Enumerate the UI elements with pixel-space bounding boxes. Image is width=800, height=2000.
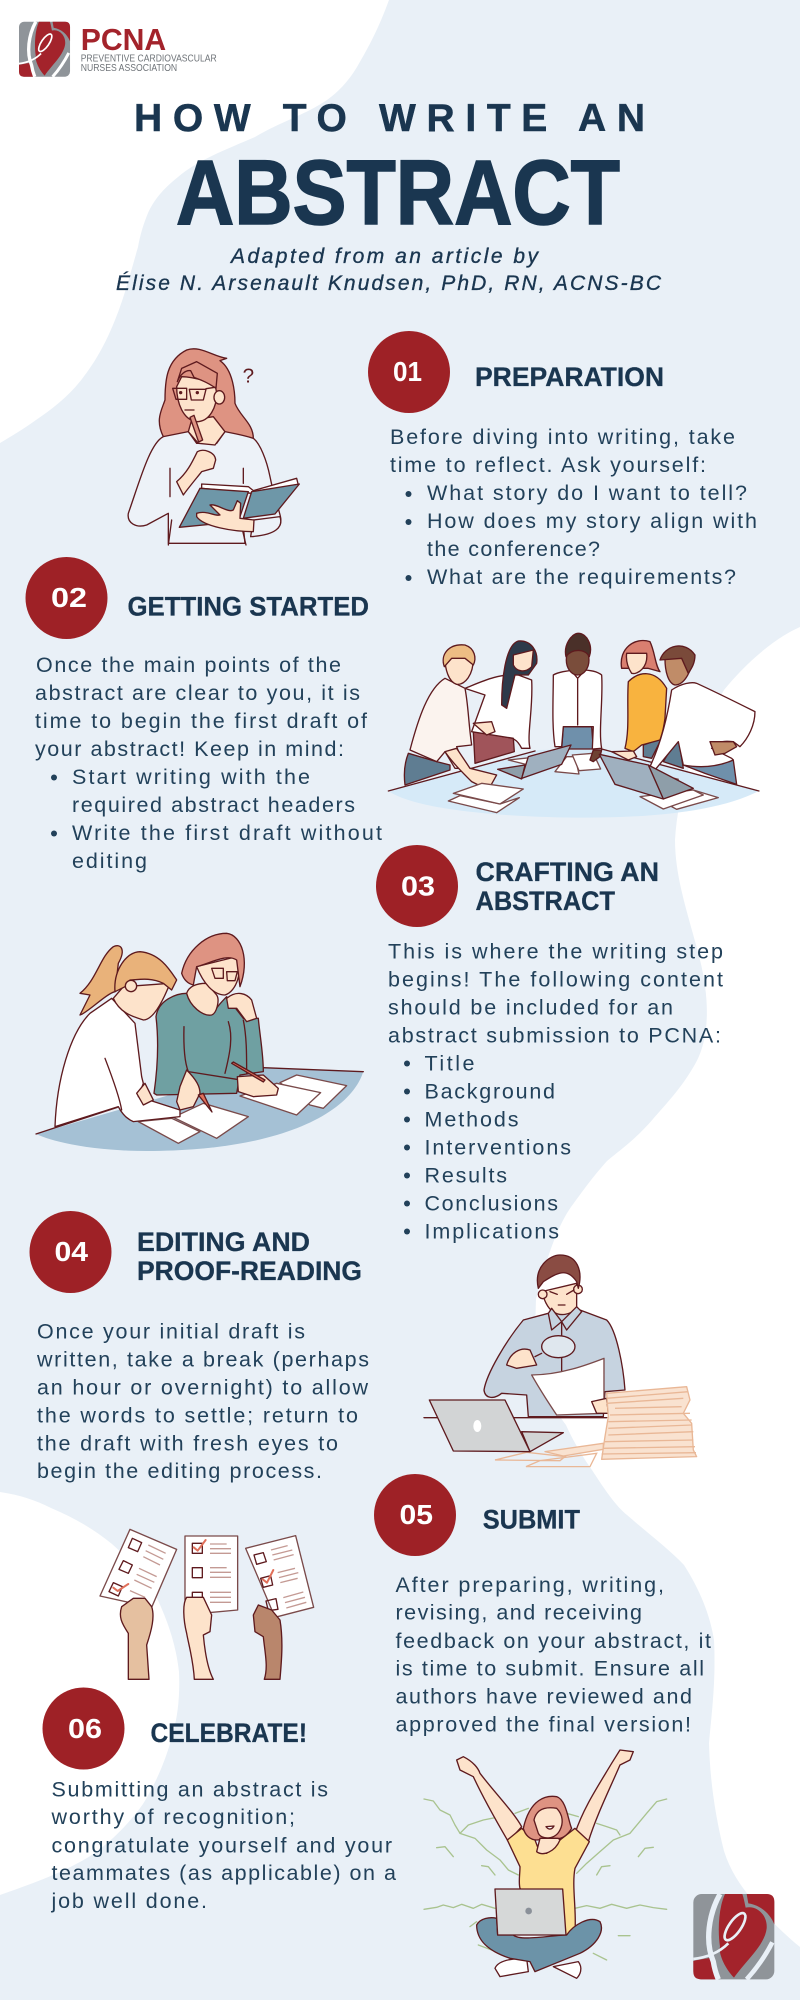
body text: job well done.: [50, 1889, 207, 1913]
checklist left: [100, 1529, 177, 1607]
body text: Conclusions: [424, 1192, 558, 1216]
body text: This is where the writing step: [388, 940, 723, 964]
body text: How does my story align with: [427, 509, 757, 533]
body text: congratulate yourself and your: [52, 1834, 392, 1858]
body text: Write the first draft without: [72, 821, 382, 845]
body text: abstract submission to PCNA:: [388, 1024, 721, 1048]
illustration: team around a table: [388, 633, 759, 818]
number badge 04: [30, 1211, 112, 1293]
heading: CRAFTING AN: [476, 857, 659, 887]
number badge 03: 03: [401, 870, 435, 902]
heading: GETTING STARTED: [128, 592, 369, 622]
illustration: man reviewing papers with a magnifier: [424, 1255, 697, 1467]
body text: [396, 1573, 711, 1736]
body text: required abstract headers: [72, 793, 355, 817]
subtitle: attribution: [116, 245, 662, 295]
number badge 04: 04: [54, 1236, 88, 1267]
checklist right: [246, 1536, 314, 1617]
logo mark: bottom right: [693, 1894, 774, 1979]
body text: What are the requirements?: [427, 565, 736, 589]
subtitle: attribution: Adapted from an article by: [229, 245, 540, 268]
body text: [388, 940, 723, 1244]
body text: teammates (as applicable) on a: [52, 1861, 396, 1885]
heading: ABSTRACT: [476, 886, 615, 916]
body text: written, take a break (perhaps: [36, 1348, 369, 1372]
title line: how to write an: HOW TO WRITE AN: [134, 97, 645, 140]
body text: time to reflect. Ask yourself:: [390, 453, 706, 477]
checklist middle: [185, 1536, 238, 1613]
body text: Title: [424, 1052, 474, 1076]
body text: Once the main points of the: [36, 653, 341, 677]
body text: Submitting an abstract is: [52, 1778, 328, 1802]
body text: abstract are clear to you, it is: [35, 681, 360, 705]
body text: the conference?: [427, 537, 600, 561]
body text: should be included for an: [388, 996, 673, 1020]
body text: authors have reviewed and: [396, 1684, 692, 1708]
body text: [390, 425, 757, 589]
heading: PREPARATION: [475, 362, 664, 392]
subtitle: attribution: Élise N. Arsenault Knudsen, PhD, RN, ACNS-BC: [116, 272, 662, 295]
body text: [50, 1778, 396, 1913]
illustration: three hands holding checklists: [100, 1529, 314, 1679]
body text: Start writing with the: [72, 765, 310, 789]
body text: the draft with fresh eyes to: [37, 1432, 338, 1456]
heading: PROOF-READING: [137, 1256, 362, 1286]
number badge 05: 05: [400, 1499, 433, 1530]
section 04: editing and proof-reading: [30, 1211, 369, 1483]
body text: Once your initial draft is: [37, 1320, 305, 1344]
illustration: two women writing at a table: [36, 933, 363, 1151]
body text: Interventions: [424, 1136, 571, 1160]
heading: EDITING AND: [137, 1227, 310, 1257]
heading: CELEBRATE!: [150, 1718, 307, 1748]
number badge 02: [26, 557, 108, 639]
section 02: getting started: [26, 557, 382, 873]
body text: is time to submit. Ensure all: [396, 1656, 704, 1680]
body text: begin the editing process.: [37, 1459, 322, 1483]
number badge 05: [374, 1474, 456, 1556]
body text: time to begin the first draft of: [35, 709, 367, 733]
question mark: ?: [243, 365, 254, 388]
logo mark: [19, 22, 70, 77]
body text: What story do I want to tell?: [427, 481, 747, 505]
illustration: woman reading a book: [128, 349, 299, 545]
body text: [36, 1320, 369, 1483]
body text: Implications: [424, 1220, 559, 1244]
number badge 01: 01: [393, 356, 422, 387]
section 01: preparation: [368, 331, 757, 589]
logo tagline: NURSES ASSOCIATION: [81, 63, 177, 74]
number badge 06: 06: [68, 1713, 102, 1744]
body text: your abstract! Keep in mind:: [35, 737, 344, 761]
body text: Background: [424, 1080, 555, 1104]
logo: PCNA header: [19, 22, 217, 77]
body text: Methods: [424, 1108, 518, 1132]
logo tagline: PREVENTIVE CARDIOVASCULAR: [81, 54, 217, 65]
section 03: crafting an abstract: [376, 845, 723, 1244]
title line: abstract: ABSTRACT: [176, 142, 620, 244]
title: [134, 97, 645, 244]
number badge 03: [376, 845, 458, 927]
body text: approved the final version!: [396, 1712, 691, 1736]
section 05: submit: [374, 1474, 711, 1736]
body text: the words to settle; return to: [37, 1404, 358, 1428]
body text: Results: [424, 1164, 507, 1188]
heading: SUBMIT: [483, 1505, 580, 1535]
section 06: celebrate: [42, 1688, 396, 1913]
body text: worthy of recognition;: [50, 1805, 295, 1829]
number badge 06: [42, 1688, 124, 1770]
body text: an hour or overnight) to allow: [37, 1376, 368, 1400]
body text: revising, and receiving: [396, 1600, 642, 1624]
number badge 01: [368, 331, 450, 413]
heading: [137, 1227, 362, 1286]
body text: After preparing, writing,: [396, 1573, 664, 1597]
body text: editing: [72, 849, 147, 873]
body text: feedback on your abstract, it: [396, 1629, 711, 1653]
number badge 02: 02: [51, 582, 87, 613]
body text: [35, 653, 382, 873]
illustration: celebrating woman with laptop: [424, 1750, 667, 1978]
heading: [476, 857, 659, 916]
body text: Before diving into writing, take: [390, 425, 735, 449]
logo wordmark: PCNA: [81, 22, 166, 57]
body text: begins! The following content: [388, 968, 723, 992]
